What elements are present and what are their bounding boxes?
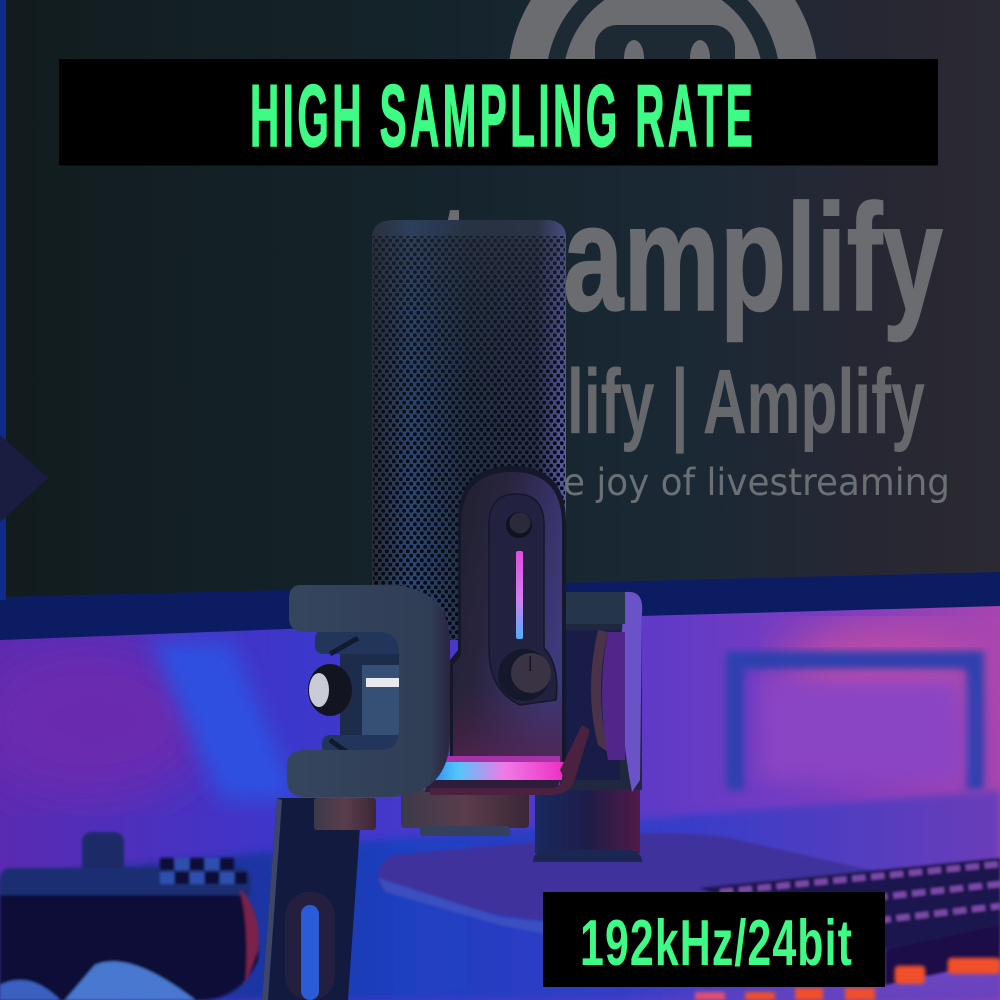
volume knob xyxy=(498,649,551,701)
monitor left edge xyxy=(0,0,6,600)
heading text: HIGH SAMPLING RATE xyxy=(250,66,753,165)
monitor lower frame xyxy=(0,570,1000,640)
C-shaped clamp xyxy=(287,585,450,797)
microphone grille xyxy=(372,220,566,640)
shock mount right side xyxy=(560,592,642,792)
microphone LED base xyxy=(425,725,590,795)
desk base plate xyxy=(378,833,1000,945)
game controller xyxy=(0,832,259,1000)
screen tagline: e joy of livestreaming xyxy=(563,461,950,504)
screen side marker xyxy=(0,435,48,522)
knurled bolts xyxy=(314,790,529,836)
pivot mount inner xyxy=(308,630,405,763)
power button xyxy=(506,512,532,538)
screen logo rings xyxy=(510,0,816,59)
white highlight strip xyxy=(366,678,400,687)
mounting bracket xyxy=(262,798,362,1000)
desk surface xyxy=(0,790,1000,1000)
stand column xyxy=(533,785,642,862)
specification text: 192kHz/24bit xyxy=(580,906,852,979)
specification banner xyxy=(543,892,885,987)
monitor screen xyxy=(0,0,1000,600)
screen brand name: stre xyxy=(385,173,560,343)
microphone control panel xyxy=(450,466,566,772)
heading banner xyxy=(59,59,938,166)
screen brand name xyxy=(448,199,944,342)
pivot screw xyxy=(308,664,352,716)
light indicator bar xyxy=(516,551,523,639)
keyboard xyxy=(695,858,1000,1000)
